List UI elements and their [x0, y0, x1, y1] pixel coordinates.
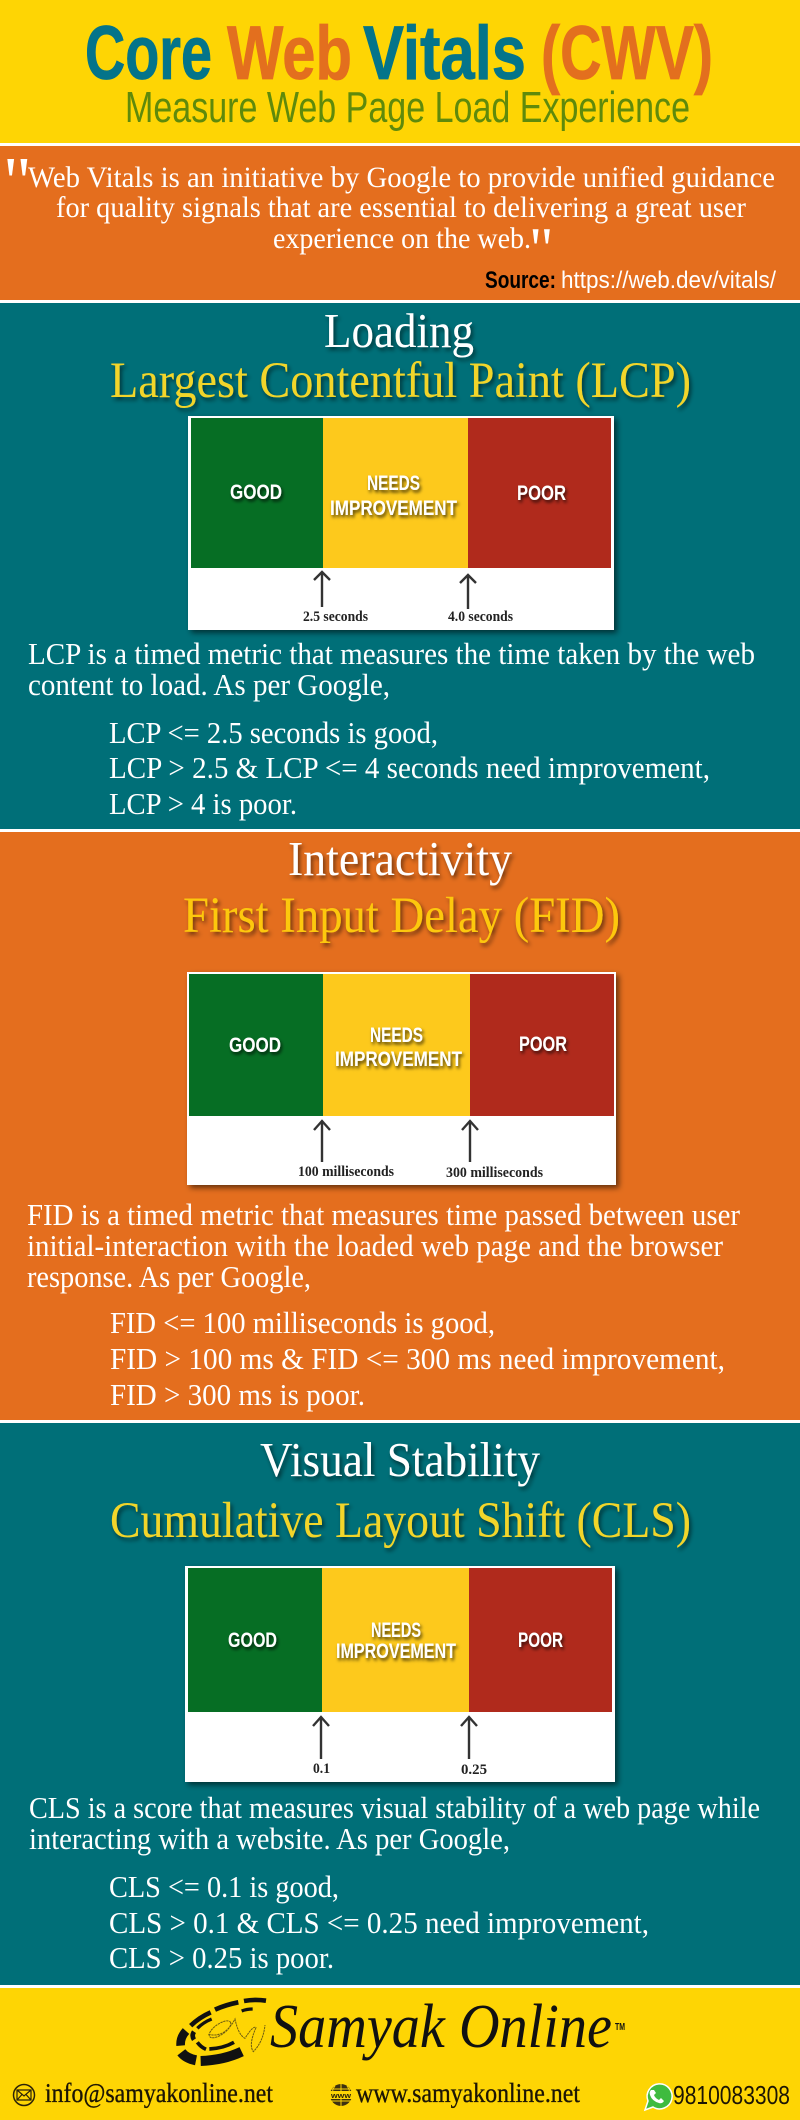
quote text: " [3, 144, 32, 221]
list: LCP thresholds: LCP > 4 is poor. [109, 786, 297, 821]
logo mark [181, 2000, 266, 2061]
list: FID thresholds: FID > 100 ms & FID <= 300 ms need improvement, [110, 1341, 725, 1376]
panel: header [0, 0, 800, 143]
title: Core [85, 11, 212, 96]
contact: website: www.samyakonline.net [356, 2078, 580, 2108]
contact: website: www [330, 2093, 352, 2100]
title: (CWV) [541, 11, 713, 96]
gauge: CLS thresholds: 0.1 [313, 1761, 330, 1777]
text: LCP description: LCP is a timed metric that measures the time taken by the web [28, 636, 755, 671]
gauge: CLS thresholds: IMPROVEMENT [336, 1640, 456, 1663]
logo wordmark: TM [615, 2022, 625, 2033]
list: LCP thresholds [109, 715, 710, 821]
list: LCP thresholds: LCP > 2.5 & LCP <= 4 seconds need improvement, [109, 750, 710, 785]
panel: interactivity FID [0, 831, 800, 1420]
text: FID description: initial-interaction with the loaded web page and the browser [27, 1228, 724, 1263]
gauge: CLS thresholds [185, 1566, 615, 1782]
heading: Interactivity: Interactivity [288, 831, 512, 886]
text: CLS description: interacting with a website. As per Google, [29, 1821, 510, 1856]
heading: First Input Delay: First Input Delay (FID) [183, 888, 620, 944]
text: LCP description [28, 636, 755, 702]
gauge: LCP thresholds [188, 416, 614, 630]
gauge: CLS thresholds: 0.25 [461, 1762, 487, 1778]
quote text: experience on the web. [273, 222, 531, 255]
list: CLS thresholds: CLS > 0.1 & CLS <= 0.25 need improvement, [109, 1905, 649, 1940]
list: LCP thresholds: LCP <= 2.5 seconds is good, [109, 715, 438, 750]
gauge: LCP thresholds: 4.0 seconds [448, 609, 513, 625]
heading: Loading: Loading [324, 303, 474, 358]
gauge: FID thresholds: NEEDS [370, 1024, 423, 1047]
text: LCP description: content to load. As per Google, [28, 667, 390, 702]
gauge: FID thresholds: GOOD [229, 1034, 281, 1057]
quote text: " [529, 216, 554, 282]
heading: Visual Stability: Visual Stability [260, 1432, 540, 1487]
gauge: LCP thresholds: GOOD [230, 481, 282, 504]
list: CLS thresholds [109, 1869, 649, 1975]
gauge: LCP thresholds: IMPROVEMENT [330, 497, 457, 520]
list: FID thresholds: FID <= 100 milliseconds is good, [110, 1305, 495, 1340]
gauge: CLS thresholds: POOR [518, 1629, 563, 1652]
gauge: CLS thresholds: NEEDS [371, 1619, 421, 1642]
gauge: FID thresholds: IMPROVEMENT [335, 1048, 462, 1071]
heading: Cumulative Layout Shift: Cumulative Layout Shift (CLS) [110, 1493, 691, 1549]
gauge: LCP thresholds: POOR [517, 482, 566, 505]
list: CLS thresholds: CLS <= 0.1 is good, [109, 1869, 339, 1904]
list: CLS thresholds: CLS > 0.25 is poor. [109, 1940, 334, 1975]
source line: https://web.dev/vitals/ [561, 267, 776, 294]
heading: Largest Contentful Paint: Largest Contentful Paint (LCP) [110, 353, 691, 409]
panel: quote [0, 144, 800, 300]
source line: Source: [485, 267, 556, 294]
gauge: CLS thresholds: GOOD [228, 1629, 277, 1652]
text: FID description: FID is a timed metric that measures time passed between user [27, 1197, 741, 1232]
quote text [3, 144, 775, 282]
text: FID description [27, 1197, 741, 1294]
gauge: LCP thresholds: 2.5 seconds [303, 609, 368, 625]
logo wordmark: Samyak Online [270, 1993, 612, 2061]
gauge: FID thresholds [187, 972, 616, 1185]
gauge: FID thresholds: 100 milliseconds [298, 1164, 394, 1180]
list: FID thresholds: FID > 300 ms is poor. [110, 1377, 365, 1412]
quote text: for quality signals that are essential to delivering a great user [56, 191, 746, 224]
title: Vitals [363, 11, 526, 96]
contact: email: info@samyakonline.net [45, 2078, 273, 2108]
gauge: FID thresholds: 300 milliseconds [446, 1165, 543, 1181]
list: FID thresholds [110, 1305, 725, 1412]
panel: loading LCP [0, 303, 800, 829]
title [85, 11, 713, 96]
panel: visual stability CLS [0, 1423, 800, 1985]
gauge: LCP thresholds: NEEDS [367, 472, 420, 495]
title: Web [227, 11, 352, 96]
text: CLS description [29, 1790, 760, 1856]
panel: footer [0, 1988, 800, 2120]
text: FID description: response. As per Google, [27, 1259, 311, 1294]
quote text: Web Vitals is an initiative by Google to provide unified guidance [28, 161, 775, 194]
gauge: FID thresholds: POOR [519, 1033, 567, 1056]
